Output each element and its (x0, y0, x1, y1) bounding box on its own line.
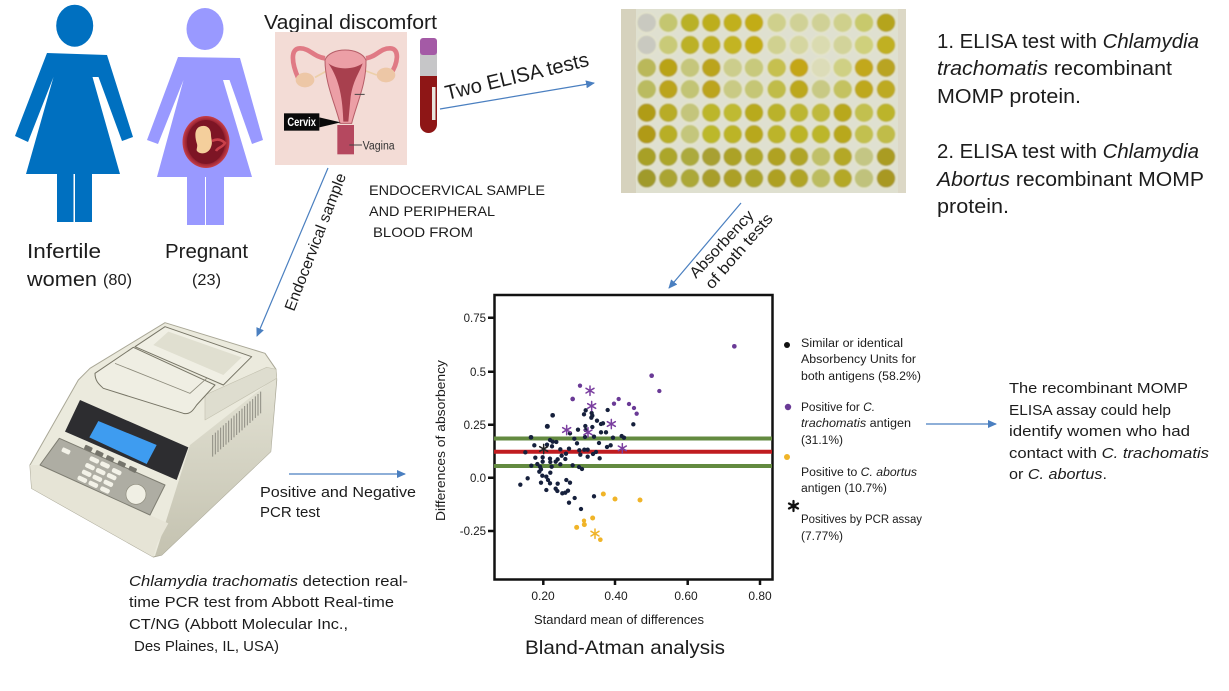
label: Positive and Negative PCR test: Positive and Negative (260, 484, 416, 501)
text: sample description: AND PERIPHERAL (369, 203, 495, 219)
text: conclusion: The recombinant MOMP (1009, 380, 1188, 397)
text: conclusion: contact with C. trachomatis (1009, 445, 1210, 462)
legend item: similar (784, 338, 921, 383)
text: ELISA tests list: 1. ELISA test with Chlamydia (937, 31, 1199, 53)
text: PCR test description: Chlamydia trachomatis detection real- (129, 573, 408, 590)
arrow: legend to conclusion (926, 423, 996, 425)
heading: Vaginal discomfort: Vaginal discomfort (264, 11, 437, 34)
legend item: similar: Similar or identical (801, 338, 903, 350)
x axis tick labels: 0.40 (604, 589, 628, 603)
text: conclusion: identify women who had (1009, 423, 1190, 440)
legend item: C. trachomatis positive: trachomatis antigen (801, 418, 911, 430)
arrow: anatomy to PCR machine (257, 168, 328, 336)
legend item: C. abortus positive (784, 454, 917, 495)
heading: Bland-Atman analysis: Bland-Atman analysis (525, 637, 725, 659)
text: sample description (369, 182, 545, 240)
legend (784, 338, 922, 543)
text: sample description: BLOOD FROM (373, 224, 473, 240)
y axis tick labels: 0.75 (464, 313, 486, 325)
y axis tick labels: 0.25 (464, 420, 486, 432)
label: Infertile women: women (26, 268, 97, 291)
x axis tick labels: 0.20 (531, 589, 555, 603)
legend item: C. trachomatis positive: (31.1%) (801, 435, 843, 447)
text: ELISA tests list: MOMP protein. (937, 86, 1081, 108)
text: ELISA tests list (936, 31, 1204, 218)
legend item: PCR positive: Positives by PCR assay (801, 514, 922, 526)
x axis tick labels: 0.80 (748, 589, 772, 603)
text: conclusion: ELISA assay could help (1009, 402, 1171, 419)
text: PCR test description: Des Plaines, IL, USA) (134, 638, 279, 655)
icon: real-time PCR machine (30, 323, 277, 557)
legend item: similar: Absorbency Units for (801, 354, 916, 366)
arrow: PCR to plot (289, 473, 405, 475)
text: sample description: ENDOCERVICAL SAMPLE (369, 182, 545, 198)
chart: Bland-Altman scatter plot (433, 295, 772, 627)
legend item: C. trachomatis positive (785, 402, 911, 447)
y axis tick labels: -0.25 (460, 526, 486, 538)
legend item: C. trachomatis positive: Positive for C. (801, 402, 875, 414)
label: Infertile women (26, 240, 132, 291)
text: PCR test description (129, 573, 408, 655)
label: Absorbency of both tests: of both tests (702, 210, 777, 293)
plot frame and ticks (488, 295, 772, 585)
icon: female reproductive anatomy (275, 32, 407, 165)
text: ELISA tests list: 2. ELISA test with Chlamydia (937, 141, 1199, 163)
icon: fetus in womb (182, 116, 230, 168)
icon: female reproductive anatomy: Cervix (287, 115, 316, 129)
legend item: C. abortus positive: Positive to C. abortus (801, 467, 917, 479)
icon: female reproductive anatomy: Vagina (363, 139, 395, 153)
y axis title: Differences of absorbency (433, 359, 448, 521)
icon: pregnant woman figure (147, 8, 263, 225)
text: conclusion: or C. abortus . (1009, 466, 1107, 483)
icon: infertile woman figure (15, 5, 133, 222)
label: Absorbency of both tests: Absorbency (686, 207, 758, 282)
x axis title: Standard mean of differences (534, 612, 704, 627)
legend item: PCR positive (789, 501, 922, 543)
text: ELISA tests list: trachomatis recombinant (937, 58, 1172, 80)
text: conclusion (1009, 380, 1210, 483)
legend item: C. abortus positive: antigen (10.7%) (801, 483, 887, 495)
text: PCR test description: CT/NG (Abbott Molecular Inc., (129, 616, 348, 633)
text: ELISA tests list: protein. (937, 196, 1009, 218)
arrow: blood to ELISA plate (440, 83, 594, 109)
image: ELISA microplate (621, 9, 906, 193)
label: Positive and Negative PCR test (260, 484, 416, 521)
label: Pregnant (165, 240, 248, 289)
data points (518, 344, 737, 542)
label: Pregnant: Pregnant (165, 240, 248, 263)
label: Pregnant: (23) (192, 272, 221, 289)
arrow: plate to plot (669, 203, 741, 288)
label: Infertile women: (80) (103, 272, 132, 289)
icon: blood sample tube (420, 38, 437, 133)
y axis tick labels: 0.5 (470, 367, 486, 379)
x axis tick labels: 0.60 (674, 589, 698, 603)
legend item: PCR positive: (7.77%) (801, 531, 843, 543)
text: PCR test description: time PCR test from Abbott Real-time (129, 594, 394, 611)
label: Positive and Negative PCR test: PCR test (260, 504, 321, 521)
text: ELISA tests list: Abortus recombinant MOMP (936, 169, 1204, 191)
y axis tick labels (460, 313, 486, 538)
label: Two ELISA tests: Two ELISA tests (443, 48, 591, 105)
reference lines (494, 438, 772, 466)
label: Infertile women: Infertile (27, 240, 101, 263)
label: Endocervical sample: Endocervical sample (282, 171, 350, 313)
y axis tick labels: 0.0 (470, 473, 486, 485)
x axis tick labels (531, 589, 772, 603)
label: Absorbency of both tests (686, 207, 777, 293)
legend item: similar: both antigens (58.2%) (801, 371, 921, 383)
